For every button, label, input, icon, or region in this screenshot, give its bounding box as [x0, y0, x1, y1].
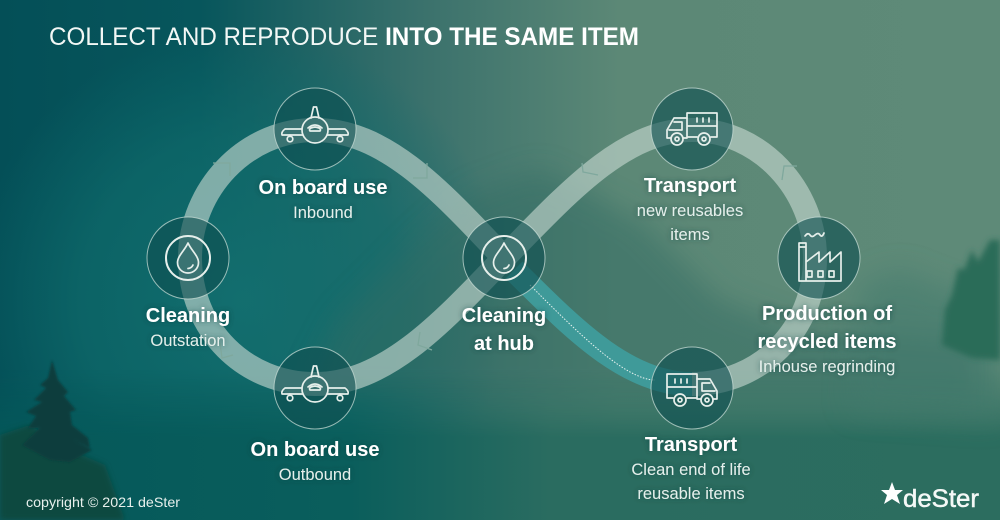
node: cleaning at hub — [463, 217, 545, 299]
infinity loop ribbon — [190, 130, 815, 384]
label: cleaning at hub: Cleaning — [462, 305, 546, 327]
label: transport new reusables: items — [670, 226, 710, 244]
node: transport new reusables — [651, 88, 733, 170]
label: on board use inbound: On board use — [259, 177, 387, 199]
label: on board use outbound — [251, 439, 379, 484]
deSter logo — [881, 482, 979, 513]
label: transport new reusables: Transport — [644, 175, 736, 197]
loop direction arrows — [213, 163, 797, 358]
label: transport end of life — [631, 434, 751, 503]
label: on board use inbound — [259, 177, 387, 222]
deSter logo: deSter — [903, 485, 979, 513]
label: cleaning outstation: Outstation — [150, 332, 226, 350]
label: transport new reusables: new reusables — [637, 202, 743, 220]
label: transport new reusables — [637, 175, 743, 244]
label: transport end of life: Transport — [645, 434, 737, 456]
teal recycled segment — [514, 270, 692, 384]
node: production factory — [778, 217, 860, 299]
node: transport end of life — [651, 347, 733, 429]
label: transport end of life: Clean end of life — [631, 461, 751, 479]
label: cleaning outstation: Cleaning — [146, 305, 230, 327]
label: production of recycled items: Production of — [762, 303, 892, 325]
label: cleaning at hub: at hub — [474, 333, 534, 355]
label: on board use outbound: Outbound — [279, 466, 351, 484]
label: on board use inbound: Inbound — [293, 204, 353, 222]
copyright note: copyright © 2021 deSter — [26, 494, 180, 510]
label: production of recycled items — [758, 303, 896, 376]
title: COLLECT AND REPRODUCE INTO THE SAME ITEM — [49, 23, 639, 51]
node: cleaning outstation — [147, 217, 229, 299]
node: on board use inbound — [274, 88, 356, 170]
label: on board use outbound: On board use — [251, 439, 379, 461]
label: production of recycled items: Inhouse regrinding — [759, 358, 895, 376]
label: cleaning outstation — [146, 305, 230, 350]
label: cleaning at hub — [462, 305, 546, 355]
node: on board use outbound — [274, 347, 356, 429]
label: transport end of life: reusable items — [637, 485, 745, 503]
label: production of recycled items: recycled items — [758, 331, 896, 353]
